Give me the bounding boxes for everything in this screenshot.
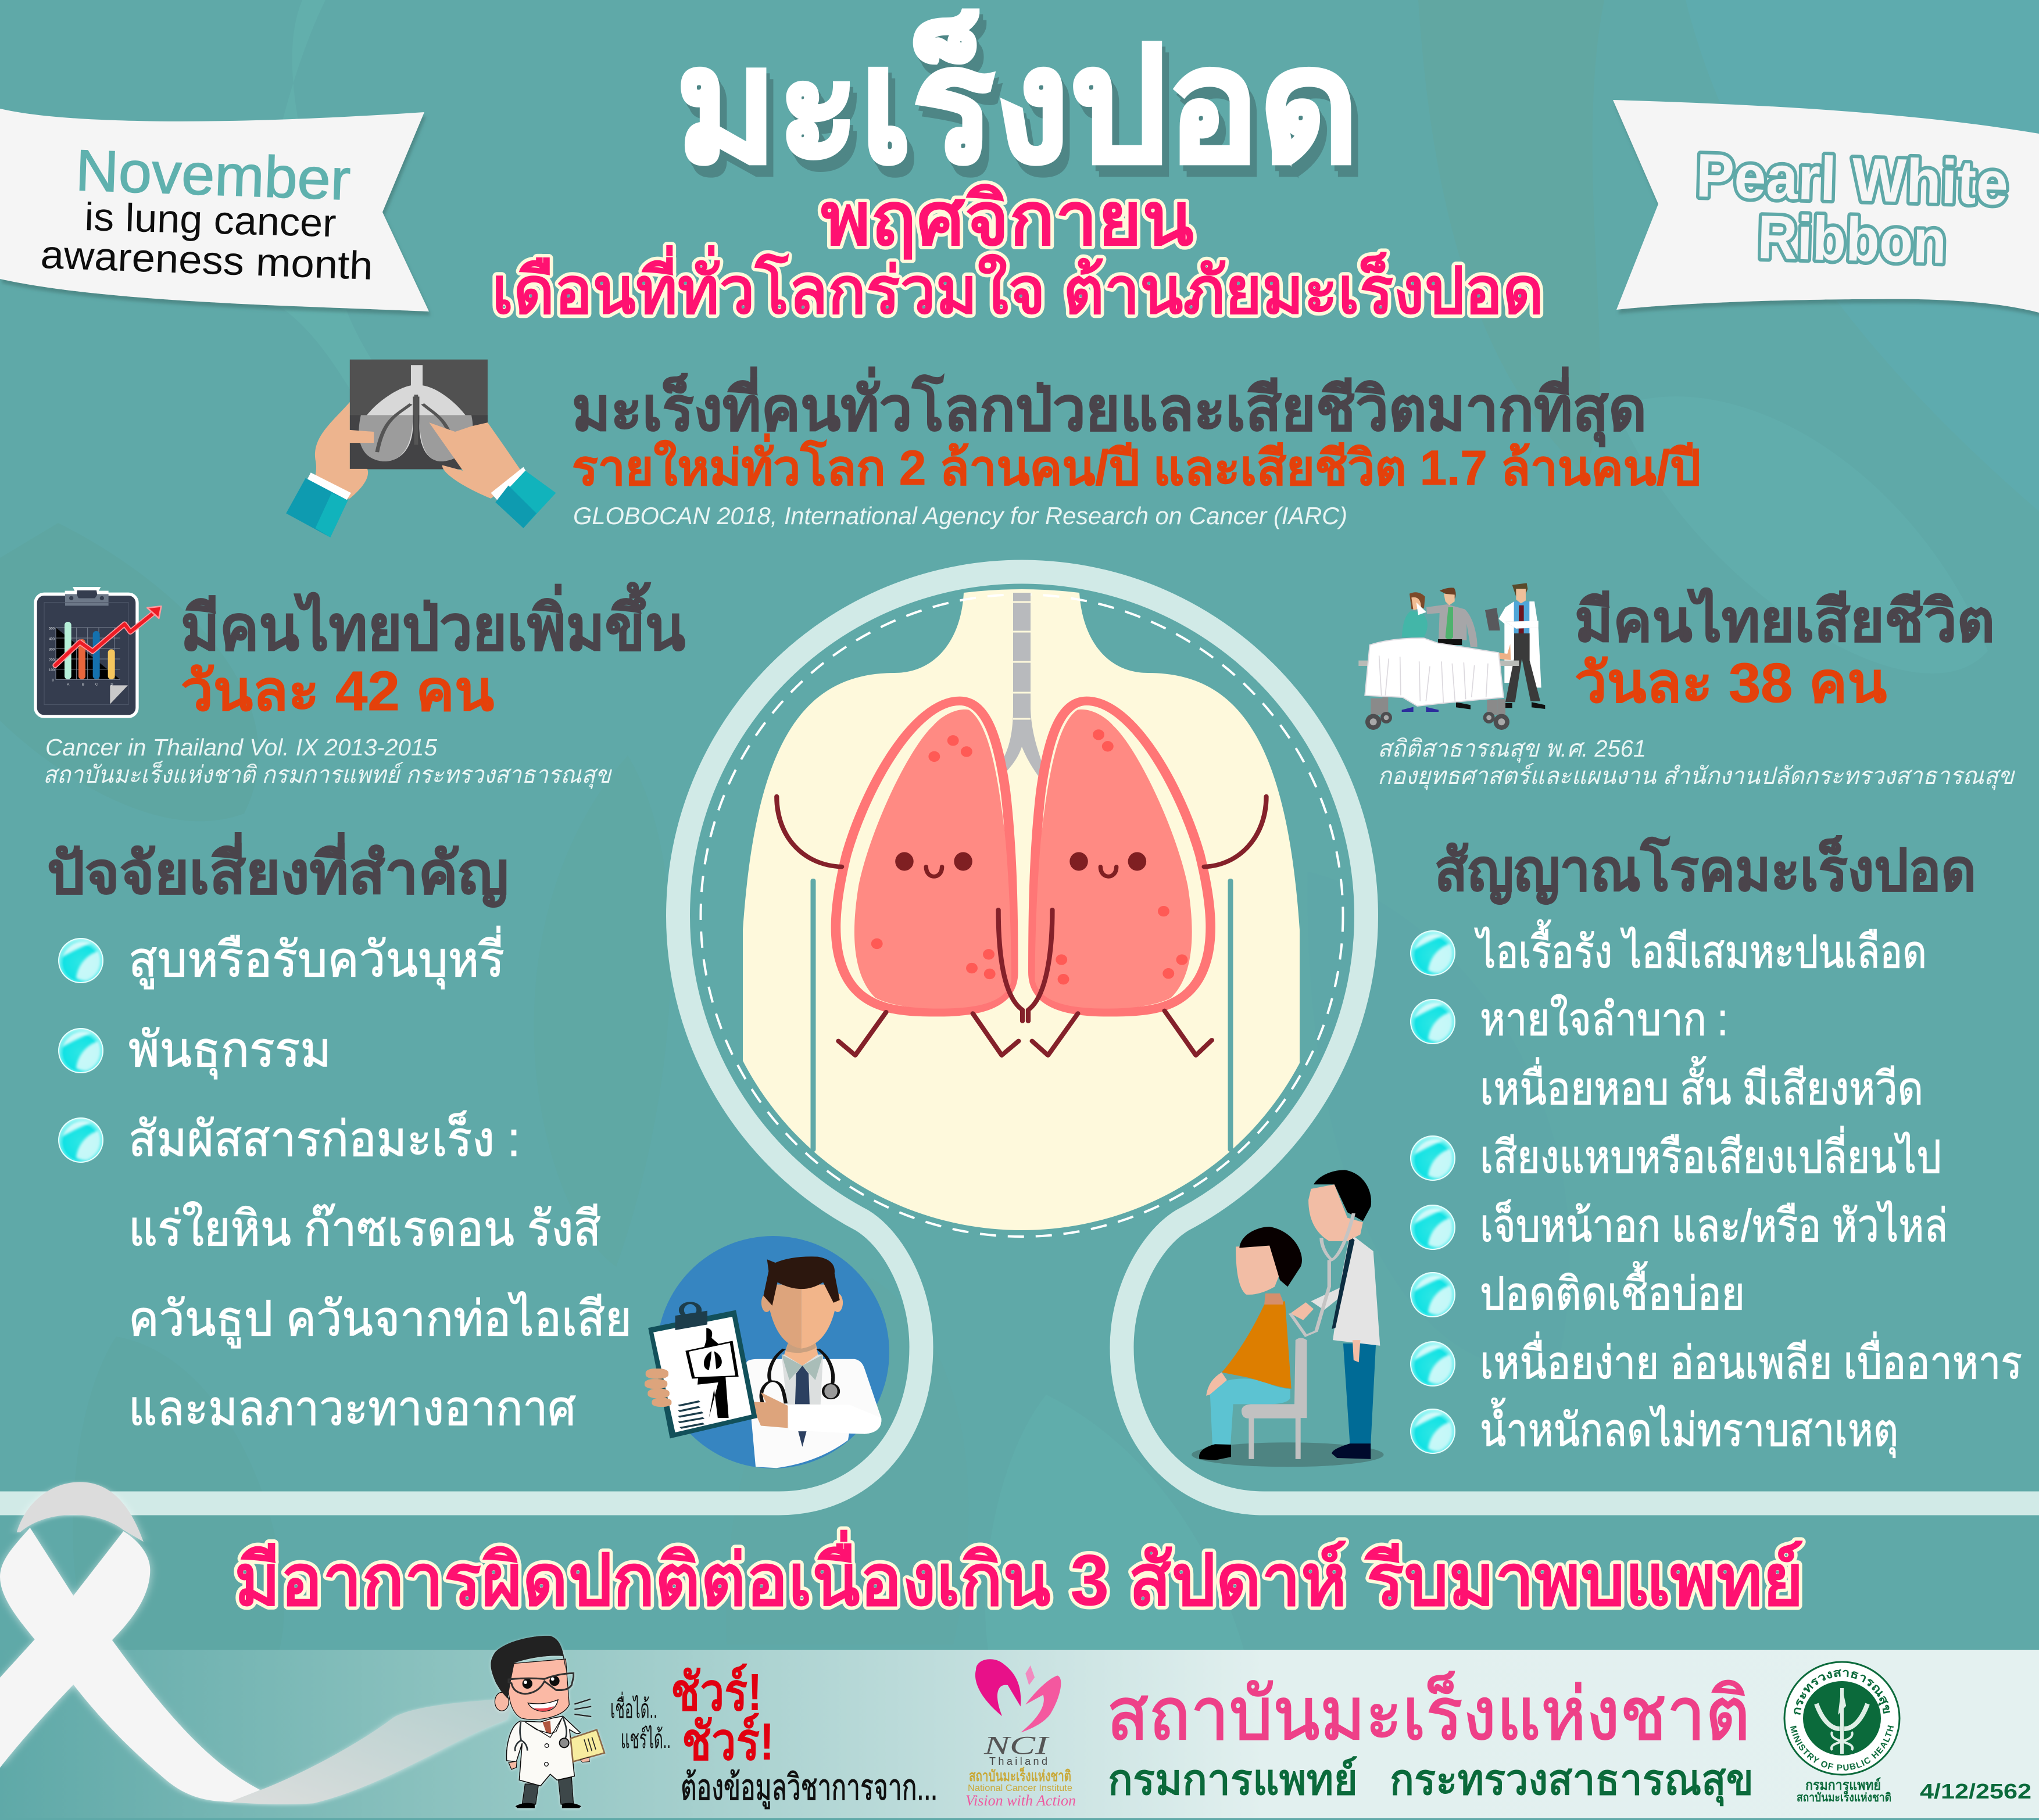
icon: clipboard chart: 200 [49,658,55,662]
heading: warning signs: สัญญาณโรคมะเร็งปอด [1435,835,1976,905]
logo: national cancer institute: สถาบันมะเร็งแห่งชาติ [969,1767,1071,1785]
icon: clipboard chart: 400 [49,637,55,641]
heading: world statistics: มะเร็งที่คนทั่วโลกป่วยและเสียชีวิตมากที่สุด [572,367,1647,447]
patient [1199,1227,1302,1460]
icon: clipboard chart [35,587,161,716]
slogan: believe and share: ชัวร์! [671,1663,762,1722]
icon: cartoon doctor [491,1636,604,1808]
caduceus emblem [1816,1688,1868,1754]
seal caption: กรมการแพทย์ [1805,1777,1881,1793]
banner: November [0,109,429,311]
world statistics numbers: รายใหม่ทั่วโลก 2 ล้านคน/ปี และเสียชีวิต 1.7 ล้านคน/ปี [572,433,1701,495]
number: 42 per day: วันละ 42 คน [181,660,494,722]
risk list: และมลภาวะทางอากาศ [128,1381,576,1435]
logo: national cancer institute: National Cancer Institute [968,1783,1072,1793]
number: 38 per day: วันละ 38 คน [1575,652,1887,714]
logo: ministry of public health seal: กระทรวงสาธารณสุข [1794,1669,1890,1715]
subtitle month: พฤศจิกายน [821,178,1194,261]
title: มะเร็งปอด [676,8,1359,195]
november text: November [74,138,352,212]
icon: hands holding x-ray [286,360,556,538]
source: cancer in thailand: Cancer in Thailand Vol. IX 2013-2015 [45,734,437,761]
icon: clipboard chart: 300 [49,648,55,651]
slogan: believe and share: แชร์ได้.. [621,1725,671,1754]
source: strategy division: กองยุทธศาสตร์และแผนงาน สำนักงานปลัดกระทรวงสาธารณสุข [1378,762,2016,790]
lungs characters [777,701,1267,1055]
source: public health statistics: สถิติสาธารณสุข พ.ศ. 2561 [1378,735,1646,763]
symptom list: เจ็บหน้าอก และ/หรือ หัวไหล่ [1480,1199,1948,1251]
ribbon text: Ribbon [1757,203,1947,276]
arms and legs [777,797,1267,1055]
risk list: แร่ใยหิน ก๊าซเรดอน รังสี [128,1201,601,1256]
icon: clipboard chart: 500 [49,627,55,630]
examining doctor [1290,1170,1380,1459]
bullets [1411,931,1455,1453]
logo: ministry of public health seal [1783,1661,1901,1776]
logo: national cancer institute: Thailand [989,1755,1050,1767]
left lung [836,701,1013,1012]
awareness month text: awareness month [40,232,374,288]
symptom list: น้ำหนักลดไม่ทราบสาเหตุ [1480,1398,1898,1458]
right lung [1033,701,1211,1012]
icon: clipboard chart: 0 [52,679,54,683]
icon: doctors at bedside [1358,583,1545,730]
symptom list [1474,919,2022,1458]
slogan: believe and share: เชื่อได้.. [610,1691,657,1724]
slogan: believe and share: ชัวร์! [682,1712,774,1771]
logo: national cancer institute: Vision with Action [965,1792,1076,1809]
panel: risk factors [47,832,632,1435]
icon: clipboard chart: D [110,683,113,686]
risk list: สัมผัสสารก่อมะเร็ง : [128,1110,520,1166]
heading: thai deaths: มีคนไทยเสียชีวิต [1575,588,1995,654]
is lung cancer text: is lung cancer [84,195,337,245]
title: มะเร็งปอด [679,14,1362,201]
ring outline frame [0,572,2039,1503]
symptom list: ไอเรื้อรัง ไอมีเสมหะปนเลือด [1474,919,1927,977]
source: national cancer institute: สถาบันมะเร็งแห่งชาติ กรมการแพทย์ กระทรวงสาธารณสุข [43,761,613,789]
heading: see a doctor callout: มีอาการผิดปกติต่อเนื่องเกิน 3 สัปดาห์ รีบมาพบแพทย์ [234,1529,1804,1621]
icon: clipboard chart: 100 [49,669,55,672]
illustration: doctor with x-ray [645,1236,889,1468]
symptom list: เสียงแหบหรือเสียงเปลี่ยนไป [1480,1126,1941,1183]
icon: clipboard chart: B [82,683,84,686]
heading: risk factors: ปัจจัยเสี่ยงที่สำคัญ [47,832,509,908]
ministry: กระทรวงสาธารณสุข [1390,1755,1754,1806]
symptom list: ปอดติดเชื้อบ่อย [1480,1261,1745,1319]
risk list: ควันธูป ควันจากท่อไอเสีย [128,1291,632,1348]
heading: thai patients: มีคนไทยป่วยเพิ่มขึ้น [181,582,685,663]
seal caption [1797,1777,1891,1804]
risk list: พันธุกรรม [128,1022,331,1080]
subtitle awareness line: เดือนที่ทั่วโลกร่วมใจ ต้านภัยมะเร็งปอด [492,245,1544,327]
title: มะเร็งปอด [683,20,1366,207]
seal caption: สถาบันมะเร็งแห่งชาติ [1797,1790,1891,1804]
pearl white text: Pearl White [1695,141,2009,218]
trachea [997,593,1044,776]
department: กรมการแพทย์ [1108,1755,1358,1804]
dashed inner circle [701,594,1343,1237]
logo: national cancer institute [965,1659,1076,1809]
panel: warning signs [1411,835,2022,1458]
icon: clipboard chart: C [95,683,98,686]
symptom list: หายใจลำบาก : [1480,994,1728,1045]
icon: clipboard chart: A [67,683,69,686]
date: 4/12/2562 [1920,1779,2031,1803]
symptom list: เหนื่อยหอบ สั้น มีเสียงหวีด [1480,1056,1923,1114]
slogan: believe and share: ต้องข้อมูลวิชาการจาก... [681,1768,938,1809]
chest body [743,589,1300,1278]
logo: national cancer institute: NCI [983,1731,1050,1760]
risk list: สูบหรือรับควันบุหรี่ [128,926,505,990]
banner: Pearl White Ribbon [1613,100,2039,313]
chair [1242,1338,1307,1459]
slogan: believe and share [610,1663,938,1809]
footer band [0,1650,2039,1818]
bullets [59,938,103,1162]
risk list [128,926,632,1435]
illustration: doctor examining patient [1192,1170,1384,1467]
source: globocan: GLOBOCAN 2018, International Agency for Research on Cancer (IARC) [573,502,1347,529]
logo: ministry of public health seal: MINISTRY OF PUBLIC HEALTH [1790,1725,1894,1771]
icon: white ribbon [0,1482,514,1804]
organization name: สถาบันมะเร็งแห่งชาติ [1107,1671,1750,1755]
